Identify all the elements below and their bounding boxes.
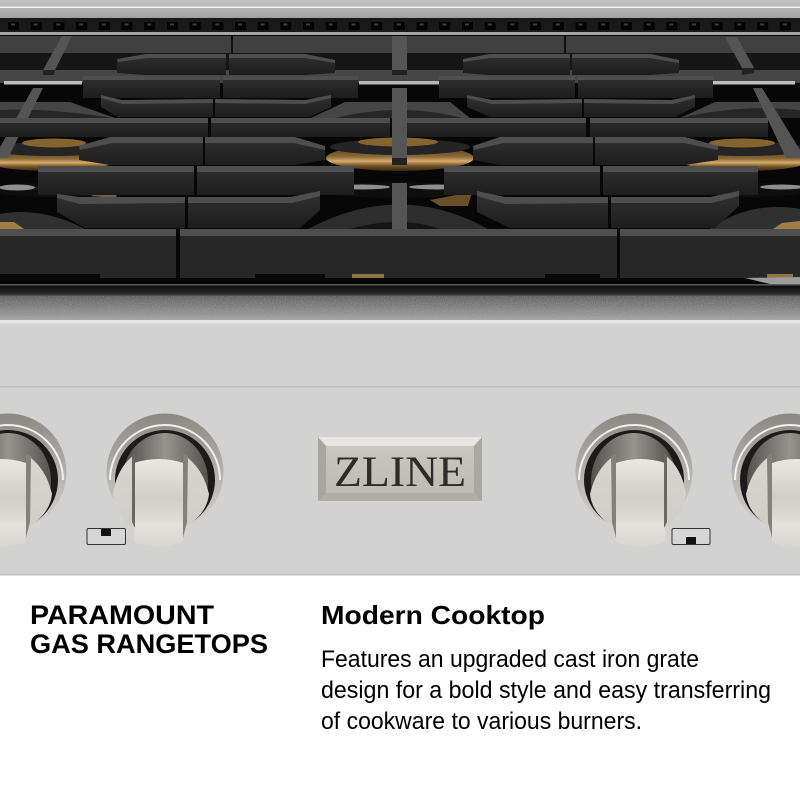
feature description: [321, 646, 771, 735]
grate bar row 7: [57, 191, 739, 228]
grate bar row 3: [101, 95, 695, 117]
product title: PARAMOUNT: [30, 600, 215, 630]
product title: GAS RANGETOPS: [30, 629, 268, 659]
gas burners: [0, 138, 800, 229]
knob 3: [576, 414, 692, 547]
grate bar row 5: [79, 137, 718, 165]
feature description: of cookware to various burners.: [321, 708, 642, 735]
feature description: design for a bold style and easy transferring: [321, 677, 771, 704]
grate bar row 2: [83, 76, 713, 98]
grate bar row 4: [0, 118, 768, 137]
indicator: left burner position: [87, 528, 126, 544]
cooktop photo: [0, 0, 800, 576]
burner: right: [680, 138, 800, 229]
burner well background: [0, 35, 800, 280]
knob 2: [106, 414, 224, 547]
logo plate: ZLINE: [334, 449, 466, 496]
speckled steel counter band: [0, 296, 800, 320]
logo plate: [318, 437, 482, 501]
grate: vertical and diagonal fingers: [0, 36, 800, 231]
feature heading: Modern Cooktop: [321, 600, 545, 630]
product title: [30, 600, 268, 659]
grate bar row 8: front bars: [0, 229, 800, 278]
feature description: Features an upgraded cast iron grate: [321, 646, 699, 673]
indicator: right burner position: [672, 528, 710, 544]
front panel: [0, 320, 800, 576]
knob 1: [0, 414, 66, 547]
cast iron grate: [0, 36, 800, 278]
knob 4: [732, 414, 800, 547]
grate bar row 6: [38, 166, 758, 195]
back rail: brushed steel with white line: [0, 0, 800, 18]
burner: centre: [308, 138, 488, 229]
under-grate shadow: [0, 274, 800, 296]
grate bar row 1: [117, 54, 679, 75]
vent strip with holes: [0, 18, 800, 35]
burner: left: [0, 138, 118, 229]
